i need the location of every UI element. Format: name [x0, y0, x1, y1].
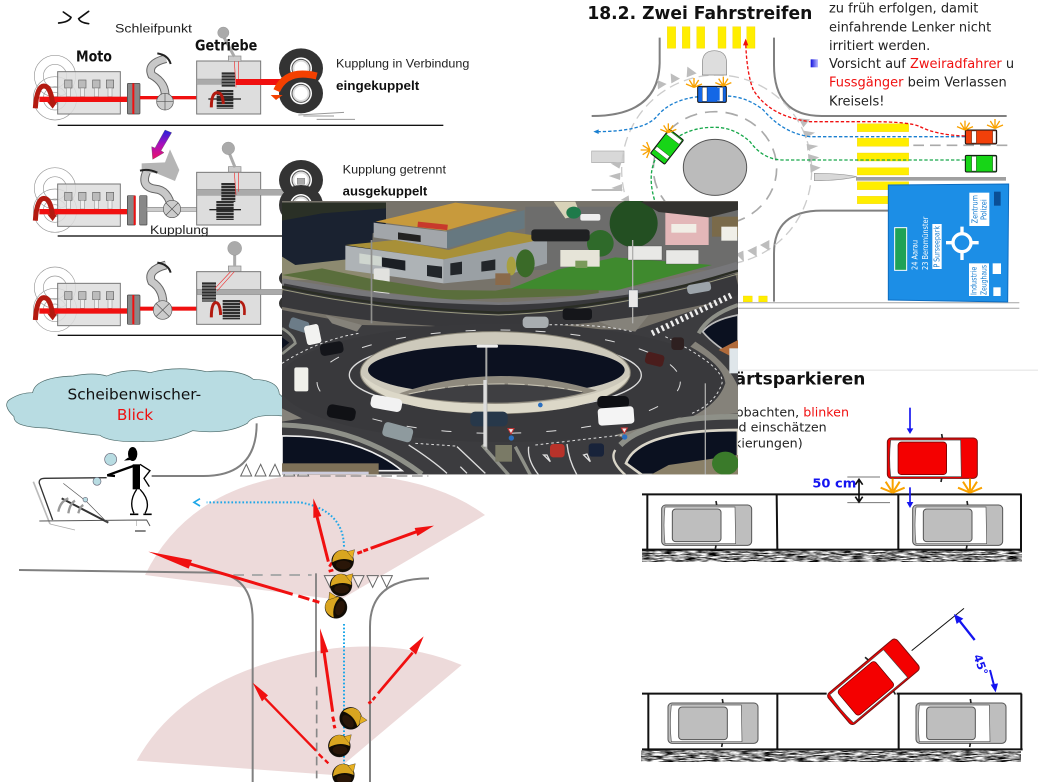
- route: green dashed: [651, 127, 965, 202]
- gaze arrows: [148, 498, 434, 763]
- arrowhead blue chevron: [194, 499, 200, 506]
- driver heads: [322, 550, 367, 782]
- text block: parking notes: Abstand einschätzen: [695, 420, 827, 435]
- icon: eyes squiggle: [59, 11, 89, 24]
- text block: caution notes: einfahrende Lenker nicht: [829, 20, 991, 35]
- top island: [702, 51, 727, 75]
- diagram: gear change: [33, 241, 311, 332]
- icon: gaze circles: [83, 453, 117, 502]
- panel: windshield wiper look: [7, 369, 485, 782]
- label: Kupplung: Kupplung: [150, 223, 209, 237]
- icon: purple press arrow and foot: [142, 130, 179, 181]
- arrowhead red: [743, 39, 748, 45]
- label: Schleifpunkt: Schleifpunkt: [115, 21, 193, 35]
- text block: caution notes: Fussgänger beim Verlassen: [829, 76, 1007, 91]
- photo: corner underpasses and rails: [282, 305, 739, 475]
- route: red dashed: [746, 42, 965, 136]
- text block: caution notes: Kreisels!: [829, 94, 884, 109]
- photo: upper road and guard rail: [282, 267, 738, 317]
- text block: caution notes: irritiert werden.: [829, 39, 930, 54]
- text: Kupplung in Verbindung: Kupplung in Verbindung: [336, 57, 469, 70]
- photo: light poles and signs: [282, 240, 738, 475]
- road sign: blue direction sign: Polizei: [979, 199, 989, 220]
- central island: [683, 139, 747, 195]
- label: Moto: Moto: [76, 48, 112, 66]
- ring lane dashes: [622, 75, 812, 265]
- illustration: windshield with wiper: [33, 478, 150, 532]
- yield triangles: [609, 67, 821, 262]
- route: blue dashed: [596, 96, 965, 137]
- photo: vehicles: [288, 281, 712, 457]
- angle: 45 degrees: [912, 608, 998, 692]
- heading: 18.2 Zwei Fahrstreifen: 18.2. Zwei Fahrstreifen: [587, 4, 812, 24]
- car: green right: [965, 155, 997, 172]
- road sign: blue direction sign: 24 Aarau: [909, 240, 919, 270]
- road edges: [592, 38, 1007, 302]
- cloud: Scheibenwischer-Blick: [7, 369, 287, 442]
- panel: roundabout two lanes: [587, 2, 1019, 309]
- text block: caution notes: [829, 2, 1014, 109]
- diagram: engaged clutch: [33, 27, 355, 120]
- yield triangles: [241, 464, 392, 587]
- road sign: blue direction sign: Industrie: [969, 267, 979, 295]
- car: blue: [698, 86, 726, 102]
- route: blue dotted: [207, 502, 344, 765]
- car: red at 45 degrees: [823, 634, 923, 729]
- road edges: [19, 423, 429, 782]
- centre line and markings: [233, 476, 428, 778]
- road sign: blue direction sign: Zentrum: [969, 195, 979, 223]
- vision sector: lower: [137, 646, 462, 775]
- photo: road surface: [278, 295, 738, 475]
- heading: Rückwärtsparkieren: Rückwärtsparkieren: [672, 369, 865, 389]
- angle: 45 degrees: 45°: [971, 652, 991, 677]
- photo: aerial roundabout: [278, 199, 739, 475]
- road sign: blue direction sign: 23 Beromünster: [920, 216, 930, 270]
- panel: clutch diagrams: [33, 11, 469, 336]
- flashes: [881, 479, 982, 493]
- photo: background lots and buildings: [282, 199, 739, 300]
- text: ausgekuppelt: ausgekuppelt: [343, 185, 428, 199]
- arrowhead blue: [593, 129, 599, 134]
- photo: central ring and underpass: [360, 332, 630, 414]
- icon: stick figure pointing: [107, 447, 152, 514]
- parking row one: [642, 494, 1022, 562]
- text block: parking notes: Beobachten, blinken: [719, 404, 849, 419]
- road sign: blue direction sign: [888, 184, 1009, 302]
- parking row two: [641, 694, 1023, 762]
- crosswalk stripes: [667, 27, 909, 302]
- dimension: 50 cm: [812, 475, 890, 503]
- dimension: 50 cm: 50 cm: [812, 475, 856, 490]
- blue alignment arrows: [907, 408, 913, 508]
- photo: lane markings: [282, 325, 722, 475]
- indicator flashes: [641, 77, 1003, 158]
- text block: caution notes: zu früh erfolgen, damit: [829, 2, 978, 17]
- road sign: blue direction sign: Zeughaus: [979, 265, 989, 295]
- car: red approach: [887, 434, 977, 482]
- road sign: blue direction sign: P Surseepark: [931, 226, 941, 268]
- text block: caution notes: Vorsicht auf Zweiradfahrer u: [829, 57, 1014, 72]
- car: green in ring: [650, 129, 684, 164]
- label: Getriebe: Getriebe: [195, 38, 257, 55]
- diagram: disengaged clutch: [33, 142, 323, 232]
- cloud: Scheibenwischer-Blick: Blick: [117, 406, 153, 424]
- panel: reverse parking: [641, 369, 1038, 762]
- car: red: [965, 130, 997, 144]
- text block: parking notes: [695, 404, 849, 450]
- icon: blue bullet: [811, 59, 818, 67]
- text: eingekuppelt: eingekuppelt: [336, 79, 420, 93]
- cloud: Scheibenwischer-Blick: Scheibenwischer-: [68, 385, 201, 403]
- vision sector: upper: [145, 474, 485, 600]
- text: Kupplung getrennt: Kupplung getrennt: [343, 163, 447, 176]
- text block: parking notes: (Markierungen): [705, 435, 803, 450]
